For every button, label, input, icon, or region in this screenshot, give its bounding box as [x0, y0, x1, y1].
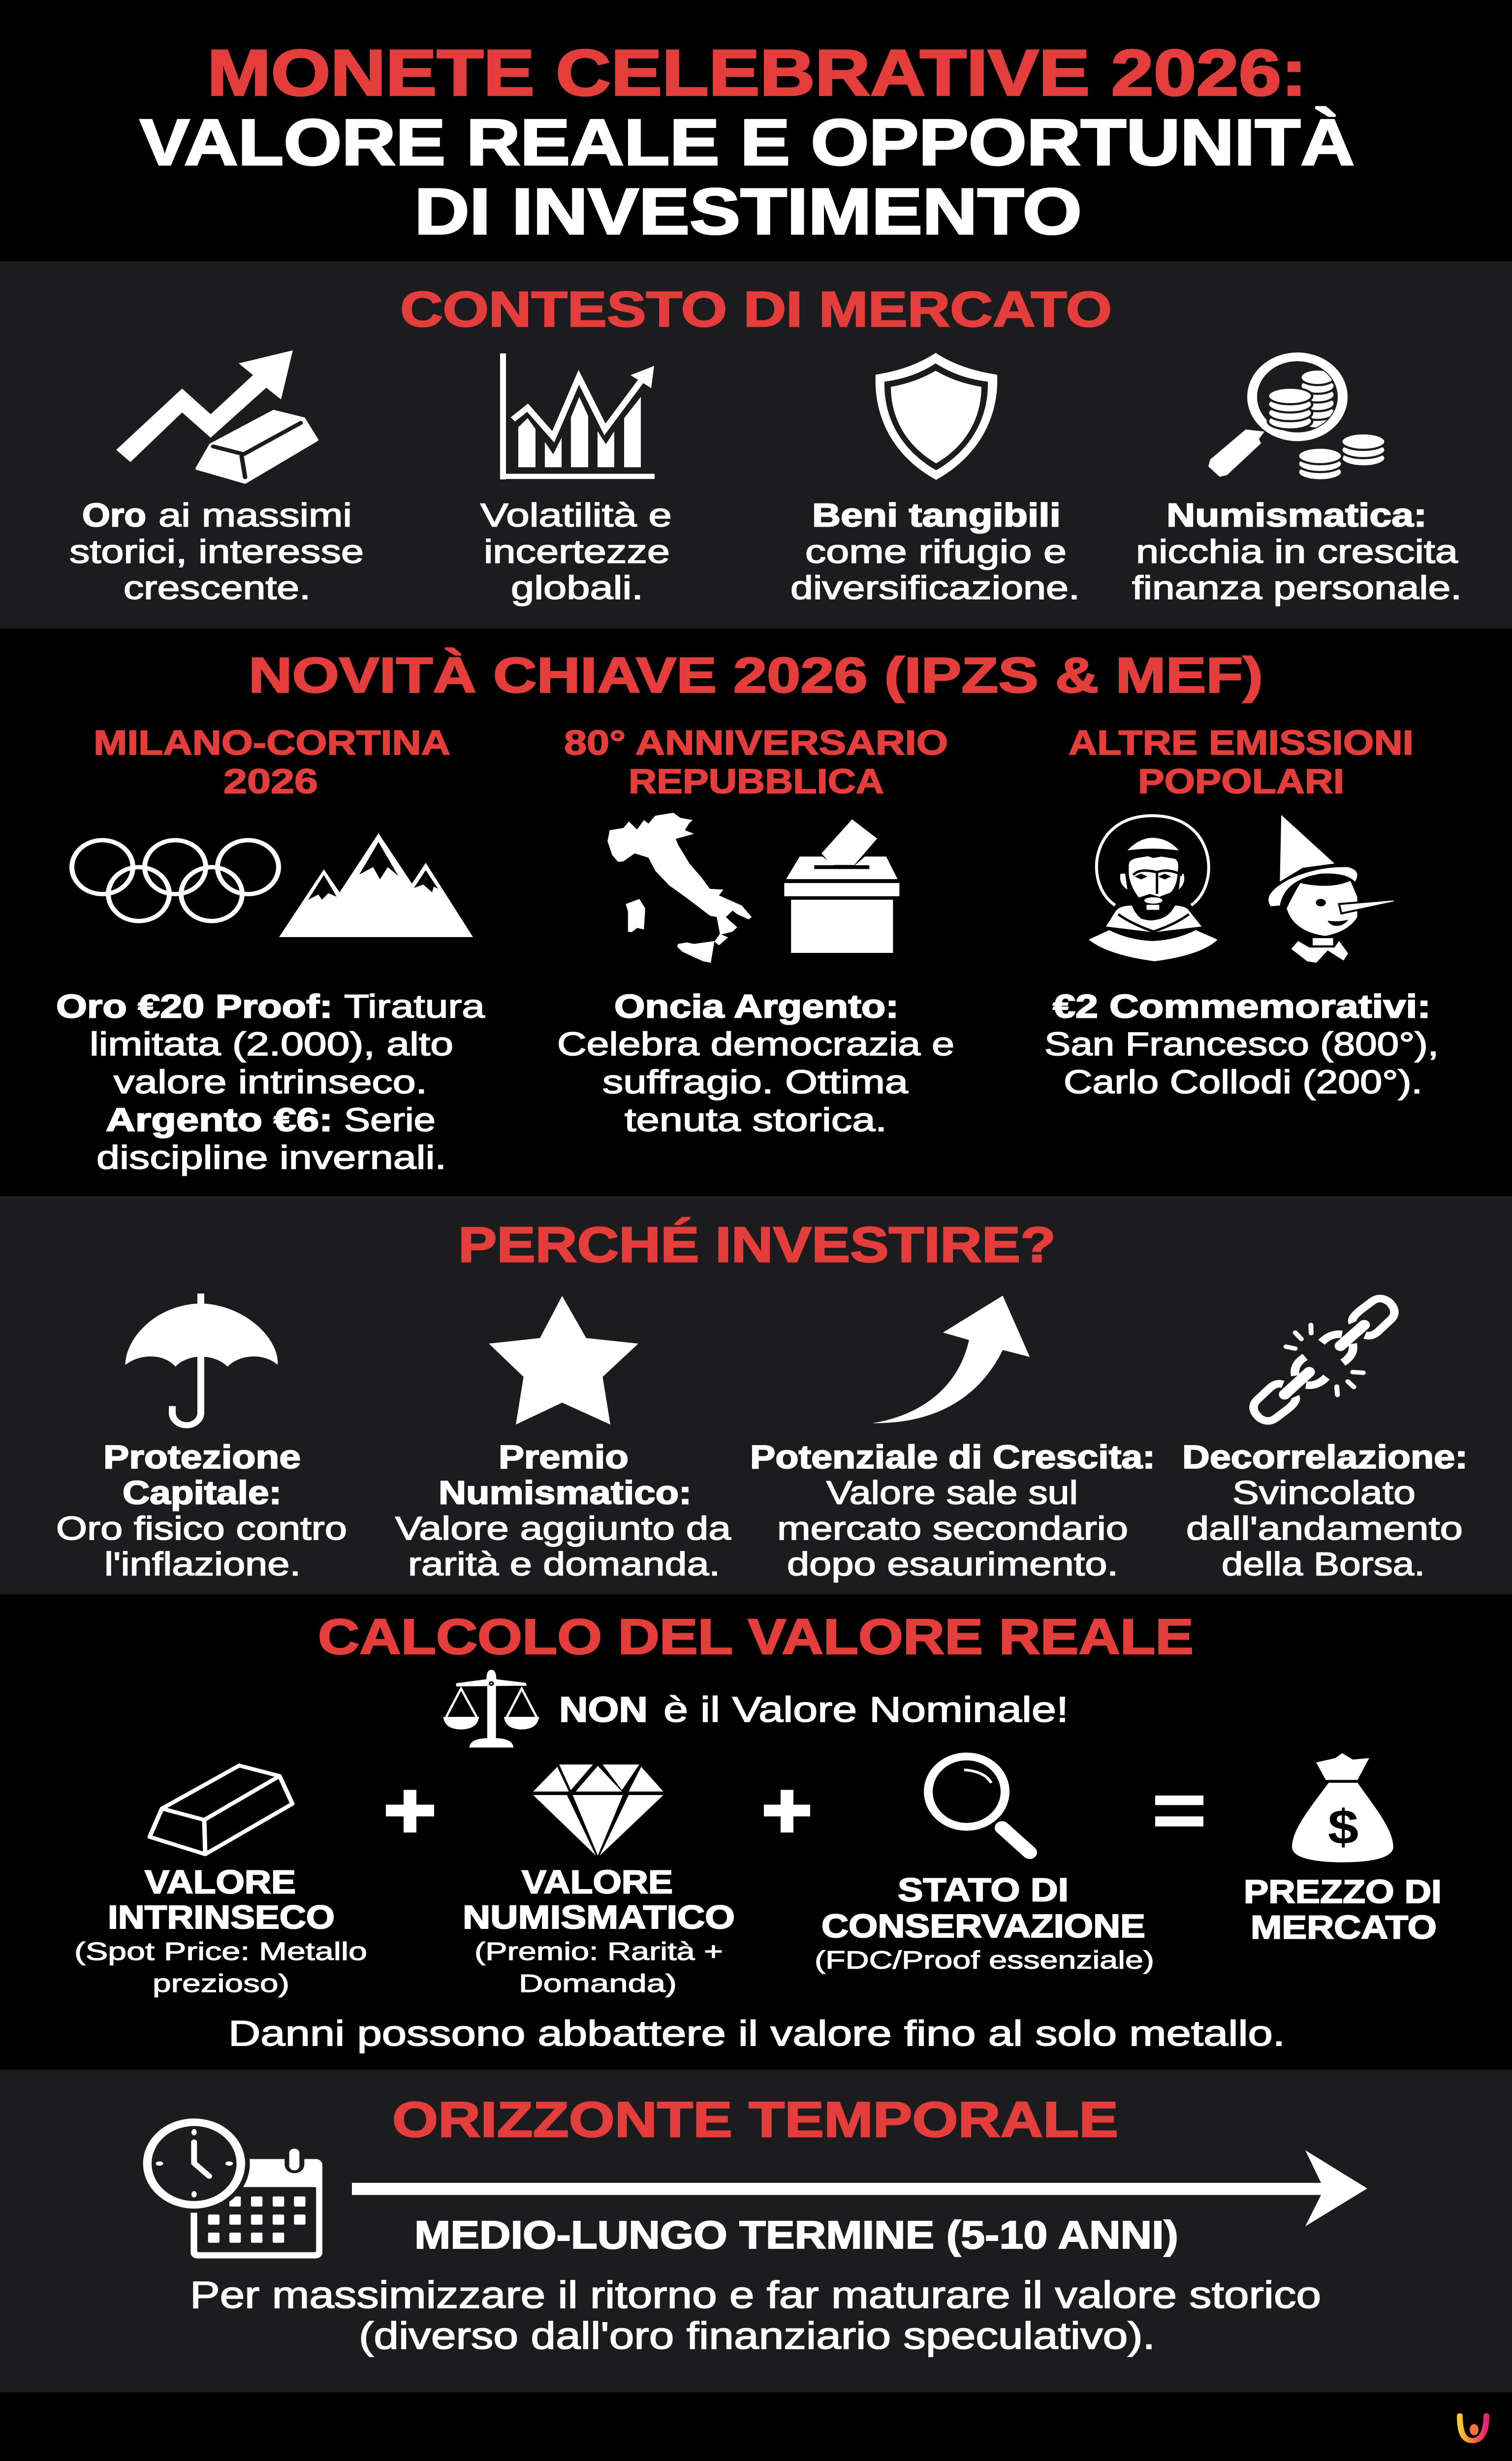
text: beni tangibili: [790, 497, 1080, 606]
arrow: timeline: [352, 2150, 1367, 2226]
text: oro ai massimi: [69, 497, 364, 606]
icon: growth arrow: [873, 1295, 1030, 1423]
icon: shield: [876, 353, 997, 480]
icon: volatility chart: [500, 353, 655, 479]
text: per massimizzare: (diverso dall'oro finanziario speculativo).: [359, 2315, 1155, 2357]
icon: scales: [443, 1670, 539, 1748]
subheading: 80° anniversario: 80° ANNIVERSARIO: [564, 723, 948, 762]
heading: orizzonte temporale: ORIZZONTE TEMPORALE: [392, 2091, 1118, 2147]
text: potenziale di crescita: dopo esaurimento.: [787, 1546, 1118, 1582]
text: premio numismatico: [395, 1439, 731, 1582]
text: potenziale di crescita: Potenziale di Crescita:: [750, 1439, 1155, 1476]
text: €2 commemorativi: €2 Commemorativi:: [1053, 988, 1431, 1025]
text: decorrelazione: [1182, 1439, 1468, 1582]
text: oro ai massimi: storici, interesse: [69, 534, 364, 570]
icon: rising arrow and gold bar: [116, 350, 317, 482]
text: potenziale di crescita: Valore sale sul: [826, 1475, 1078, 1511]
heading: contesto di mercato: CONTESTO DI MERCATO: [400, 281, 1112, 337]
text: oro €20 proof: limitata (2.000), alto: [90, 1026, 453, 1063]
text: oro ai massimi: Oro: [82, 497, 146, 534]
text: oro €20 proof: Tiratura: [344, 988, 485, 1025]
heading: calcolo del valore reale: CALCOLO DEL VALORE REALE: [318, 1609, 1194, 1665]
label: valore numismatico: Domanda): [519, 1969, 677, 1997]
text: per massimizzare: [190, 2274, 1321, 2357]
icon: olympic rings: [72, 840, 279, 921]
subheading: 80° anniversario: [564, 723, 948, 801]
text: oro ai massimi: ai massimi: [158, 497, 352, 534]
icon: pinocchio: [1268, 815, 1396, 963]
title: MONETE CELEBRATIVE 2026:: [207, 36, 1307, 109]
label: valore numismatico: VALORE: [522, 1864, 673, 1901]
label: valore intrinseco: VALORE: [145, 1864, 296, 1901]
panel: orizzonte temporale: [0, 2070, 1512, 2392]
text: protezione capitale: l'inflazione.: [104, 1546, 301, 1582]
label: valore intrinseco: INTRINSECO: [108, 1899, 335, 1936]
text: numismatica: nicchia in crescita: [1136, 534, 1458, 570]
text: volatilità: [480, 497, 672, 606]
label: valore numismatico: [463, 1864, 735, 1997]
text: oncia argento: tenuta storica.: [625, 1102, 887, 1138]
text: oncia argento: Oncia Argento:: [614, 988, 899, 1025]
subheading: altre emissioni: POPOLARI: [1138, 762, 1344, 801]
label: valore intrinseco: [74, 1864, 367, 1997]
panel: novità chiave 2026: [56, 647, 1439, 1176]
icon: diamond: [533, 1765, 663, 1856]
icon: plus: [764, 1790, 810, 1832]
icon: star: [489, 1296, 638, 1424]
icon: umbrella: [126, 1294, 278, 1425]
text: premio numismatico: Numismatico:: [439, 1475, 692, 1511]
text: oro €20 proof: discipline invernali.: [96, 1139, 446, 1176]
text: numismatica: finanza personale.: [1132, 569, 1462, 606]
icon: magnifier with coins: [1208, 357, 1386, 480]
text: beni tangibili: Beni tangibili: [812, 497, 1061, 534]
icon: money bag: $: [1328, 1800, 1358, 1855]
text: non è il valore nominale: è il Valore Nominale!: [663, 1690, 1069, 1730]
text: danni: Danni possono abbattere il valore fino al solo metallo.: [228, 2014, 1285, 2053]
text: oncia argento: Celebra democrazia e: [557, 1026, 954, 1063]
icon: mountains: [279, 833, 473, 937]
label: stato di conservazione: (FDC/Proof essenziale): [815, 1946, 1154, 1974]
subheading: altre emissioni: [1069, 723, 1414, 801]
text: oro €20 proof: Argento €6:: [106, 1102, 333, 1138]
text: beni tangibili: diversificazione.: [790, 569, 1080, 606]
text: premio numismatico: rarità e domanda.: [408, 1546, 720, 1582]
text: oro €20 proof: [56, 988, 485, 1176]
icon: money bag: [1292, 1753, 1393, 1862]
text: protezione capitale: Capitale:: [123, 1475, 282, 1511]
text: potenziale di crescita: mercato secondario: [777, 1510, 1128, 1547]
icon: broken chain: [1254, 1298, 1394, 1421]
icon: clock and calendar: [138, 2114, 322, 2258]
text: decorrelazione: dall'andamento: [1186, 1510, 1463, 1547]
label: valore intrinseco: (Spot Price: Metallo: [74, 1937, 367, 1965]
subheading: milano-cortina: MILANO-CORTINA: [94, 723, 450, 762]
subheading: 80° anniversario: REPUBBLICA: [629, 762, 884, 801]
label: valore intrinseco: prezioso): [153, 1969, 289, 1997]
subheading: milano-cortina: 2026: [223, 762, 318, 801]
text: numismatica: [1132, 497, 1462, 606]
text: decorrelazione: Decorrelazione:: [1182, 1439, 1468, 1476]
icon: logo: [1460, 2416, 1486, 2440]
subheading: altre emissioni: ALTRE EMISSIONI: [1069, 723, 1414, 762]
label: prezzo di mercato: PREZZO DI: [1244, 1873, 1442, 1910]
text: protezione capitale: Protezione: [103, 1439, 301, 1476]
text: €2 commemorativi: Carlo Collodi (200°).: [1064, 1064, 1422, 1101]
text: potenziale di crescita: [750, 1439, 1155, 1582]
text: €2 commemorativi: [1044, 988, 1439, 1101]
icon: san francesco: [1089, 816, 1218, 961]
icon: italy map: [607, 813, 752, 963]
label: stato di conservazione: CONSERVAZIONE: [821, 1908, 1145, 1945]
label: stato di conservazione: STATO DI: [898, 1872, 1069, 1909]
text: oro €20 proof: Serie: [344, 1102, 436, 1138]
text: oro ai massimi: crescente.: [124, 569, 311, 606]
text: volatilità: incertezze: [484, 534, 670, 570]
label: valore numismatico: NUMISMATICO: [463, 1899, 735, 1936]
text: decorrelazione: Svincolato: [1232, 1475, 1416, 1511]
text: beni tangibili: come rifugio e: [805, 534, 1067, 570]
subheading: milano-cortina: [94, 723, 450, 801]
panel: contesto di mercato: [0, 261, 1512, 629]
text: non è il valore nominale: NON: [559, 1690, 648, 1730]
text: decorrelazione: della Borsa.: [1222, 1546, 1425, 1582]
title: DI INVESTIMENTO: [414, 175, 1082, 248]
panel: perché investire: [0, 1196, 1512, 1594]
text: protezione capitale: Oro fisico contro: [56, 1510, 347, 1547]
icon: plus: [386, 1790, 434, 1832]
text: numismatica: Numismatica:: [1166, 497, 1427, 534]
text: volatilità: Volatilità e: [480, 497, 672, 534]
text: volatilità: globali.: [511, 569, 643, 606]
text: protezione capitale: [56, 1439, 347, 1582]
icon: gold bar outline: [150, 1766, 292, 1854]
icon: ballot box: [784, 820, 899, 953]
text: medio-lungo termine: MEDIO-LUNGO TERMINE (5-10 ANNI): [414, 2213, 1178, 2257]
text: premio numismatico: Premio: [499, 1439, 629, 1476]
label: prezzo di mercato: MERCATO: [1251, 1909, 1437, 1946]
text: oro €20 proof: valore intrinseco.: [114, 1064, 427, 1101]
text: oncia argento: [557, 988, 954, 1138]
text: oro €20 proof: Oro €20 Proof:: [56, 988, 333, 1025]
text: premio numismatico: Valore aggiunto da: [395, 1510, 731, 1547]
heading: novità chiave: NOVITÀ CHIAVE 2026 (IPZS & MEF): [249, 647, 1263, 703]
icon: equals: [1155, 1796, 1203, 1827]
text: oncia argento: suffragio. Ottima: [602, 1064, 908, 1101]
label: valore numismatico: (Premio: Rarità +: [474, 1937, 723, 1965]
label: prezzo di mercato: [1244, 1873, 1442, 1946]
title: [140, 36, 1354, 248]
text: per massimizzare: Per massimizzare il ritorno e far maturare il valore storico: [190, 2274, 1321, 2316]
title: VALORE REALE E OPPORTUNITÀ: [140, 106, 1354, 179]
heading: perché investire: PERCHÉ INVESTIRE?: [458, 1217, 1056, 1272]
panel: calcolo del valore reale: [74, 1609, 1442, 2053]
icon: magnifier: [928, 1757, 1030, 1853]
label: stato di conservazione: [815, 1872, 1154, 1974]
text: €2 commemorativi: San Francesco (800°),: [1044, 1026, 1439, 1063]
